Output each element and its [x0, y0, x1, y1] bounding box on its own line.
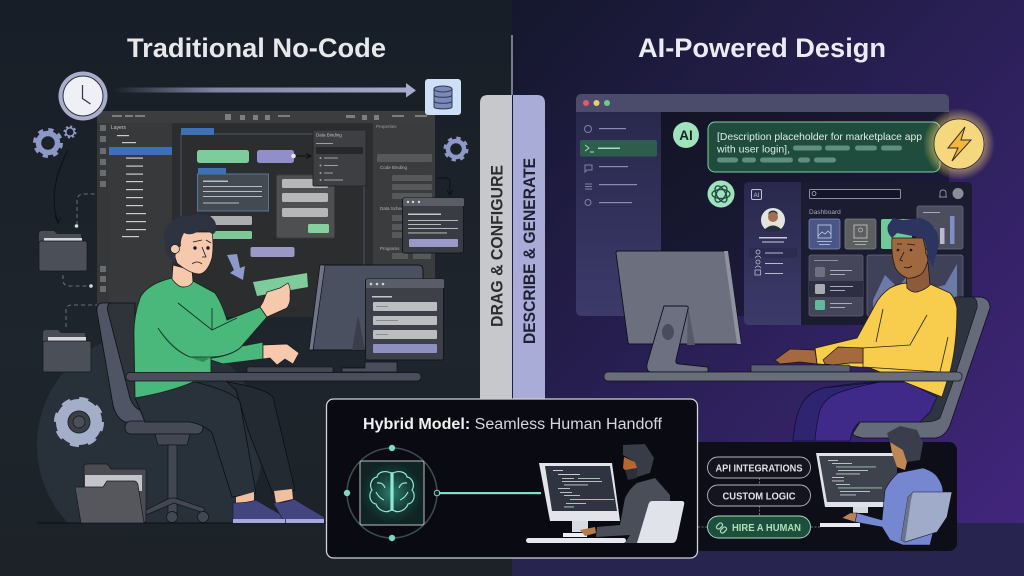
- expression: [192, 240, 211, 264]
- upper hand: [260, 283, 290, 317]
- keyboard: traditional side: [247, 367, 333, 372]
- near hand: [823, 347, 863, 365]
- neck: [172, 265, 193, 287]
- properties panel content: [377, 154, 432, 259]
- trousers back leg: [227, 382, 295, 494]
- developer hand: [842, 513, 857, 522]
- sweater: [134, 278, 267, 398]
- panel: AI browser window: [576, 94, 949, 316]
- green button: [197, 150, 249, 163]
- panel: no-code editor window: Data Schedule: [380, 206, 410, 211]
- panel: generated dashboard: AI: [754, 193, 760, 199]
- monitor: traditional side: [309, 265, 423, 372]
- panel: prompt bubble: [Description placeholder for marketplace app: [717, 131, 922, 143]
- icon: small gear: [64, 126, 76, 138]
- panel: hybrid model: [326, 399, 698, 558]
- developer torso and arm: [855, 468, 943, 545]
- panel: generated dashboard: [744, 182, 972, 325]
- hair: [164, 214, 216, 263]
- dashboard search: [810, 190, 900, 198]
- bar: Drag and Configure: DRAG & CONFIGURE: [488, 165, 506, 327]
- icon: lightning badge: [923, 108, 995, 180]
- chair back: [97, 303, 145, 412]
- dashed connector: lower folder: [66, 305, 97, 327]
- dashboard label: Dashboard: [809, 209, 841, 216]
- layers panel text: Layers: [111, 125, 127, 131]
- icon: clock: [58, 72, 108, 120]
- monitor stand foot: [342, 362, 397, 372]
- icon: AI badge: [673, 122, 699, 148]
- connector: brain to developer: [439, 492, 541, 494]
- shoes: [233, 500, 285, 523]
- panel: no-code editor window: Properties: [376, 124, 397, 129]
- bar: Describe and Generate: [513, 95, 545, 402]
- expression: [897, 249, 899, 251]
- panel: prompt bubble: [708, 122, 940, 172]
- icon: model badge: [708, 180, 734, 208]
- monitor stand: [687, 306, 695, 345]
- dashboard tile green: [881, 219, 912, 249]
- background: traditional side: [0, 0, 512, 576]
- chair: [853, 297, 990, 438]
- developer hair: [887, 426, 923, 462]
- canvas grey bar: [210, 216, 252, 225]
- trousers: [793, 382, 937, 441]
- arrow: properties to preview: [436, 178, 453, 195]
- figure: traditional user: [97, 214, 324, 523]
- trousers front leg: [135, 382, 256, 497]
- lower hand: [263, 344, 299, 365]
- arrow: gears to folder: [54, 150, 68, 223]
- face: [892, 238, 928, 278]
- pill: hire a human: [708, 516, 810, 538]
- panel: no-code editor window: [97, 111, 435, 317]
- canvas frame tag: [181, 128, 214, 135]
- pill: API integrations: API INTEGRATIONS: [716, 464, 803, 474]
- hybrid developer torso: [596, 478, 670, 543]
- panel: no-code editor window: Data Binding: [316, 132, 342, 138]
- hybrid chair: [637, 501, 684, 543]
- icon: large gear: [36, 130, 60, 156]
- ankles: [236, 489, 293, 505]
- icon: right gear: [446, 138, 466, 160]
- pill: custom logic: [708, 485, 810, 506]
- dashboard bar chart: [917, 206, 963, 249]
- ear: [926, 248, 934, 256]
- icon: folder upper: [39, 231, 87, 271]
- desk: AI side: [604, 372, 962, 381]
- selected layer row: [109, 147, 172, 155]
- panel: no-code editor window: Programs: [380, 246, 400, 251]
- hybrid developer hair: [623, 444, 654, 477]
- sweater: [815, 283, 957, 397]
- bar: Describe and Generate: DESCRIBE & GENERATE: [520, 158, 539, 344]
- orbit ring: [344, 445, 440, 541]
- backdrop circle behind left figure: [37, 332, 263, 523]
- chair post and base: [146, 434, 208, 522]
- hybrid developer hand: [580, 527, 596, 536]
- chair seat: [125, 421, 203, 434]
- bar: Drag and Configure: [480, 95, 512, 402]
- trouser back leg shade: [793, 382, 880, 441]
- hair: [888, 218, 939, 267]
- face: [172, 232, 213, 274]
- canvas green bar: [210, 231, 252, 239]
- pill: API integrations: [708, 457, 810, 478]
- selected text card: [198, 174, 268, 211]
- pill: custom logic: CUSTOM LOGIC: [722, 492, 796, 502]
- title: AI-Powered Design: AI-Powered Design: [638, 33, 886, 63]
- hybrid developer monitor: [526, 463, 626, 543]
- icon: brain tile: [360, 461, 424, 525]
- icon: folder middle: [43, 330, 91, 372]
- connector arrow: [294, 154, 311, 158]
- lower sleeve: [205, 342, 263, 364]
- panel: prompt bubble: with user login],: [716, 144, 790, 156]
- icon: open folder on floor: [75, 464, 146, 523]
- sweater shadow: [160, 330, 210, 362]
- panel: API and human add-ons: [690, 426, 957, 551]
- form card: [276, 175, 334, 238]
- icon: AI badge: AI: [679, 128, 693, 143]
- AI window sidebar: [576, 112, 661, 316]
- title: Traditional No-Code: Traditional No-Code: [127, 33, 386, 63]
- developer figure: [842, 426, 952, 545]
- dashboard tile grey: [845, 219, 876, 249]
- arrow: clock to database: [113, 83, 416, 98]
- pill: hire a human: HIRE A HUMAN: [732, 523, 801, 534]
- drag arrow: [227, 254, 245, 280]
- dashed connector: folder to node: [63, 275, 90, 286]
- developer face: [890, 442, 907, 470]
- icon: bottom gear: [57, 400, 101, 444]
- neck: [906, 263, 930, 292]
- panel: no-code editor window: Code Binding: [380, 165, 408, 170]
- hybrid heading: Hybrid Model: Seamless Human Handoff: [363, 416, 663, 433]
- hybrid developer beard: [625, 468, 637, 480]
- developer chair: [901, 492, 952, 542]
- canvas purple bar: [250, 247, 294, 257]
- dashboard list card: [809, 255, 863, 316]
- dashboard area chart: [867, 255, 963, 316]
- figure: AI user: [775, 218, 990, 441]
- developer monitor: [816, 453, 897, 527]
- background: AI side: [512, 0, 1024, 576]
- dashboard tile blue: [809, 219, 840, 249]
- purple node: [257, 150, 294, 163]
- hybrid developer figure: [580, 444, 684, 543]
- icon: database tile: [425, 79, 461, 115]
- far hand: [775, 349, 817, 364]
- keyboard: AI side: [751, 365, 850, 372]
- centre divider: [512, 35, 513, 95]
- sidebar active row: [580, 140, 657, 156]
- data binding dropdown: [313, 130, 366, 186]
- panel: form window: [366, 279, 444, 360]
- monitor: AI side: [616, 251, 741, 372]
- floor line: traditional side: [37, 522, 332, 524]
- panel: preview window: [402, 198, 464, 253]
- floor band: AI side: [512, 523, 1024, 576]
- dashed connector: folder to editor: [77, 194, 97, 225]
- desk: traditional side: [126, 372, 421, 381]
- draggable green card: [253, 273, 308, 296]
- canvas frame: [181, 134, 364, 300]
- ear: [170, 244, 180, 254]
- hybrid developer face: [623, 457, 637, 472]
- sweater creases: [863, 309, 948, 372]
- avatar: [761, 208, 785, 232]
